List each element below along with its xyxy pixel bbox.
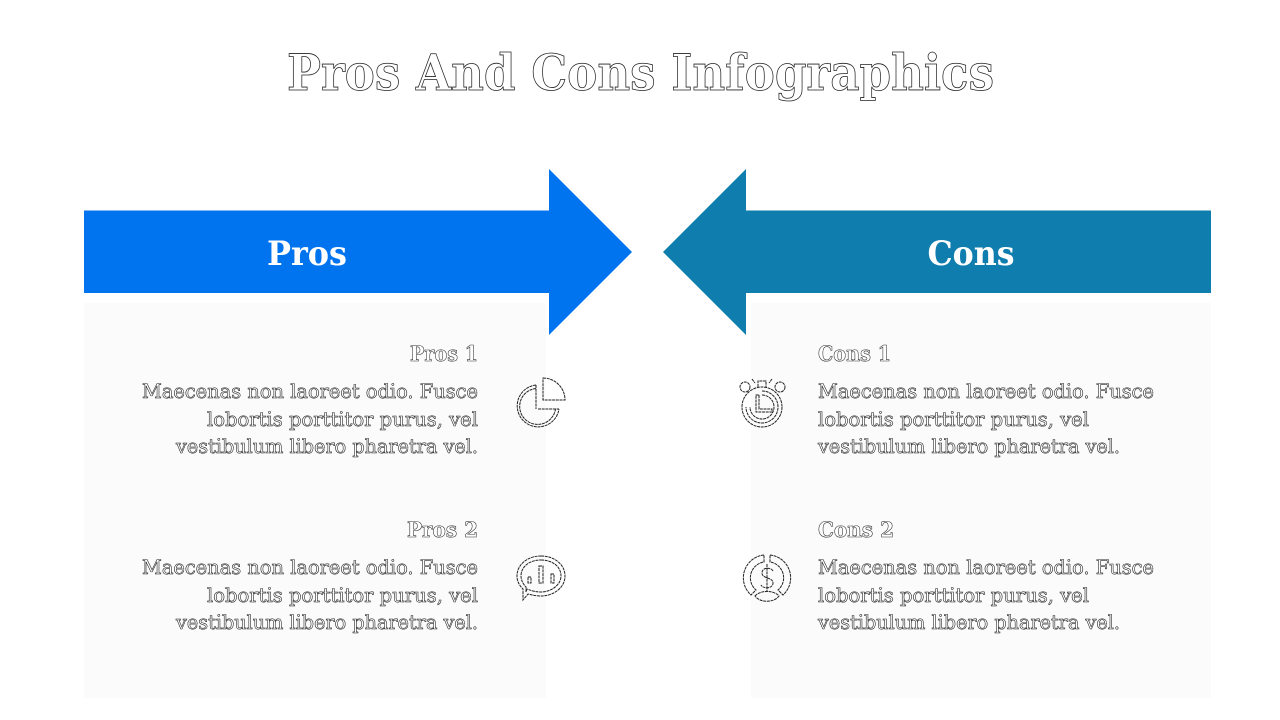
panel: cons background bbox=[751, 303, 1211, 698]
text block: cons 1: Maecenas non laoreet odio. Fusce bbox=[818, 379, 1154, 403]
icon: pie chart bbox=[517, 378, 565, 427]
arrow: pros bbox=[84, 169, 632, 335]
text block: cons 2: Maecenas non laoreet odio. Fusce bbox=[818, 555, 1154, 579]
text block: cons 2: lobortis porttitor purus, vel bbox=[818, 583, 1089, 607]
text block: pros 2: vestibulum libero pharetra vel. bbox=[175, 610, 478, 634]
text block: pros 2: Pros 2 bbox=[407, 517, 478, 542]
text block: pros 2: Maecenas non laoreet odio. Fusce bbox=[142, 555, 478, 579]
panel: pros background bbox=[84, 303, 546, 698]
text block: pros 1: vestibulum libero pharetra vel. bbox=[175, 434, 478, 458]
text block: pros 1: Maecenas non laoreet odio. Fusce bbox=[142, 379, 478, 403]
text block: pros 2: lobortis porttitor purus, vel bbox=[207, 583, 478, 607]
text block: cons 2 bbox=[817, 517, 1154, 634]
text block: pros 1: Pros 1 bbox=[410, 341, 478, 366]
text block: pros 1: lobortis porttitor purus, vel bbox=[207, 407, 478, 431]
text block: cons 2: vestibulum libero pharetra vel. bbox=[817, 610, 1120, 634]
arrow: pros: Pros bbox=[267, 234, 347, 274]
arrow: cons: Cons bbox=[928, 234, 1014, 274]
arrow: cons bbox=[663, 169, 1211, 335]
icon: dollar target bbox=[743, 555, 791, 601]
text block: cons 1 bbox=[817, 341, 1154, 458]
text block: pros 2 bbox=[142, 517, 478, 634]
text block: cons 1: vestibulum libero pharetra vel. bbox=[817, 434, 1120, 458]
icon: speech bubble with bars bbox=[517, 556, 565, 600]
icon: stopwatch bbox=[740, 379, 785, 427]
text block: cons 1: lobortis porttitor purus, vel bbox=[818, 407, 1089, 431]
text block: pros 1 bbox=[142, 341, 478, 458]
text block: cons 2: Cons 2 bbox=[818, 517, 894, 542]
text block: cons 1: Cons 1 bbox=[818, 341, 891, 366]
title: Pros And Cons Infographics bbox=[287, 43, 994, 102]
